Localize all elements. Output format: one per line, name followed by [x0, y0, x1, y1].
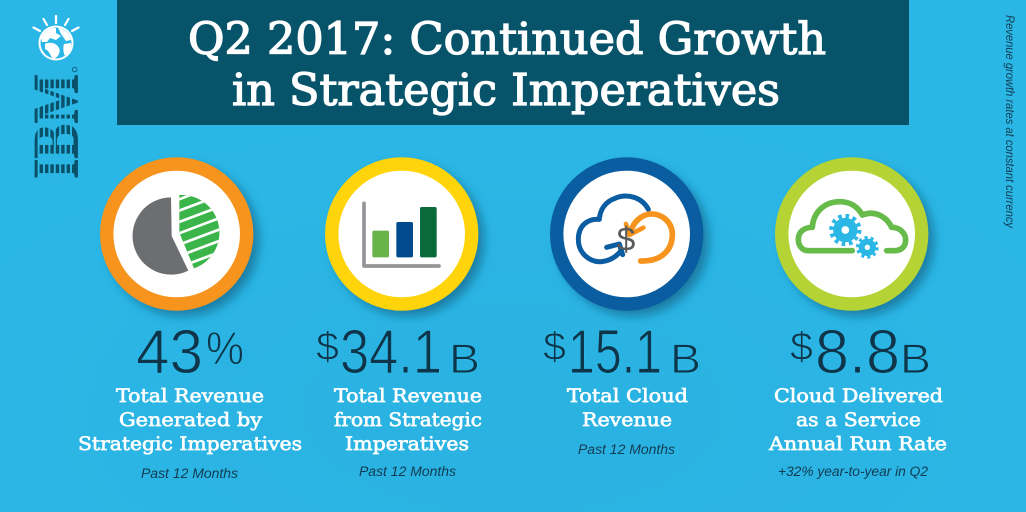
note: Past 12 Months	[141, 466, 238, 481]
figure: $34.1B: B	[449, 335, 480, 382]
figure: $15.1B: 15.1	[568, 318, 662, 387]
icon: yellow ring with bar chart	[325, 157, 484, 316]
note: Past 12 Months	[578, 442, 675, 457]
title text: Q2 2017: Continued Growth	[188, 14, 826, 65]
title banner: in Strategic Imperatives	[232, 65, 780, 116]
figure: $34.1B: $	[316, 325, 339, 369]
figure: 43%: 43	[136, 318, 203, 387]
label: Total Revenue	[116, 385, 264, 407]
figure: $15.1B: B	[670, 335, 701, 382]
panel: cloud revenue	[543, 157, 709, 457]
label: Revenue	[582, 409, 672, 431]
figure: 43%: %	[206, 322, 244, 374]
label: Strategic Imperatives	[78, 433, 302, 455]
icon: globe with light rays	[34, 16, 78, 60]
icon: orange ring with pie chart	[100, 157, 259, 316]
label	[334, 385, 482, 455]
label: Imperatives	[345, 433, 469, 455]
icon: blue ring with cloud and dollar arrows	[550, 157, 709, 316]
label: from Strategic	[334, 409, 482, 431]
logo: IBM striped wordmark: IBM	[20, 74, 92, 179]
label: Annual Run Rate	[768, 433, 947, 455]
figure: $15.1B: $	[543, 325, 566, 369]
note: +32% year-to-year in Q2	[778, 464, 928, 479]
panel: strategic imperatives revenue	[316, 157, 484, 479]
label: as a Service	[796, 409, 921, 431]
figure: $34.1B: 34.1	[340, 318, 442, 387]
panel: as-a-service run rate	[768, 157, 947, 479]
figure: 43%	[136, 318, 244, 387]
icon: lime ring with cloud and gears	[775, 157, 934, 316]
icon: blue ring with cloud and dollar arrows: $	[617, 222, 635, 259]
figure: $8.8B: 8.8	[815, 318, 900, 387]
label: Generated by	[119, 409, 262, 431]
label: Total Cloud	[567, 385, 688, 407]
figure: $8.8B: $	[790, 325, 813, 369]
note: Past 12 Months	[359, 464, 456, 479]
label	[567, 385, 688, 431]
label	[78, 385, 302, 455]
figure: $8.8B: B	[900, 335, 931, 382]
panel: strategic imperatives share	[78, 157, 302, 481]
label: Total Revenue	[334, 385, 482, 407]
side note: Revenue growth rates at constant currency	[1003, 15, 1015, 229]
label: Cloud Delivered	[774, 385, 943, 407]
figure: $8.8B	[790, 318, 931, 387]
label	[768, 385, 947, 455]
title banner	[117, 0, 909, 125]
